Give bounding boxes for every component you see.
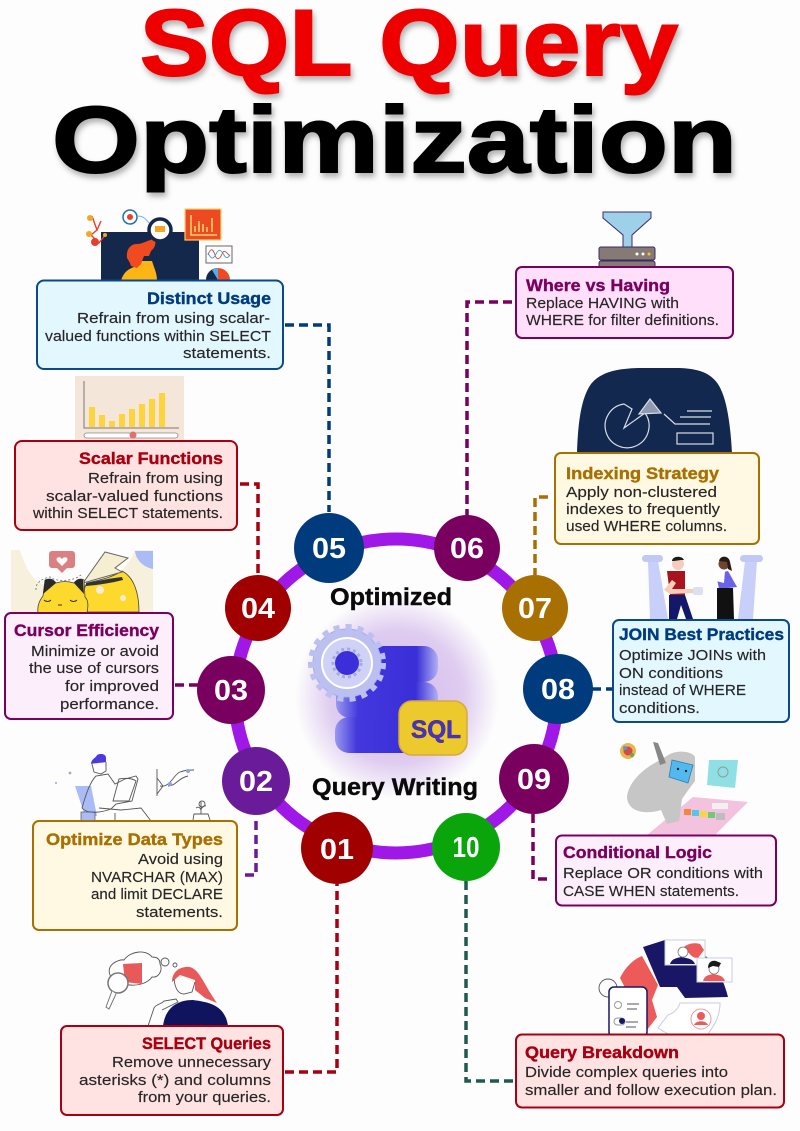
panel: Where vs Having [516,267,733,338]
description: Replace OR conditions with [563,865,763,882]
connector: step 01 [285,884,337,1072]
description: Divide complex queries into [525,1064,728,1081]
step circle 08: 08 [541,674,575,706]
step circle 04: 04 [241,593,275,625]
description [91,851,223,921]
step circle 09: 09 [517,764,551,796]
description: Minimize or avoid [31,643,159,660]
ring connecting the steps [235,539,557,853]
step circle 09 [499,744,569,814]
connector: step 08 [592,687,612,691]
panel: Indexing Strategy [555,453,759,544]
description: valued functions within SELECT [45,328,271,345]
description: instead of WHERE [619,682,746,699]
center label: Optimized: Optimized [330,584,452,611]
connector: step 02 [245,816,256,875]
panel: Query Breakdown [516,1034,784,1108]
step circle 10 [432,813,500,881]
heading: Optimize Data Types [46,830,223,849]
icon: segmented donut with profiles and phone [599,940,732,1037]
icon: woman thinking about a bag [106,952,228,1026]
description [563,865,763,900]
description: and limit DECLARE [91,886,223,903]
icon: dark board with pie chart [577,368,732,453]
description: for improved [65,678,159,695]
heading: Query Breakdown [525,1043,679,1062]
icon: person with laptop and plant [55,754,210,821]
panel: SELECT Queries [61,1026,283,1115]
icon: two people between columns [642,555,763,619]
icon: bar chart with slider [75,376,184,442]
description [526,295,719,329]
description: from your queries. [138,1089,271,1106]
step circle 05 [294,513,364,583]
heading: Indexing Strategy [566,464,720,483]
description [566,484,727,535]
icon: robot on colorful mat [620,742,748,835]
description: statements. [183,345,271,362]
description: ON conditions [619,665,723,682]
description: Optimize JOINs with [619,647,766,664]
description: performance. [60,696,159,713]
panel: Optimize Data Types [33,821,237,930]
panel: Conditional Logic [556,836,776,906]
description [619,647,766,717]
description: scalar-valued functions [46,488,223,505]
connector: step 05 [285,325,329,512]
title [52,0,737,192]
connector: step 09 [533,814,552,879]
description [45,310,271,362]
step circle 10: 10 [452,832,480,864]
heading: Where vs Having [526,276,670,295]
center label: Query Writing: Query Writing [312,774,478,801]
step circle 07 [502,575,568,641]
step circle 02 [222,747,290,815]
description: statements. [136,904,223,921]
heading: Conditional Logic [563,843,712,862]
connector: step 10 [466,881,513,1081]
heading: Cursor Efficiency [14,621,160,640]
center illustration: database, gear and SQL badge: SQL [411,716,461,744]
description: within SELECT statements. [32,505,223,522]
description [29,643,159,713]
step circle 04 [225,575,291,641]
description: smaller and follow execution plan. [525,1082,777,1099]
step circle 07: 07 [518,593,552,625]
panel: Scalar Functions [15,441,237,530]
description: Refrain from using [88,470,223,487]
description [32,470,223,522]
description: Refrain from using scalar- [77,310,270,327]
description: asterisks (*) and columns [79,1072,271,1089]
heading: JOIN Best Practices [619,625,784,644]
panel: Cursor Efficiency [5,613,173,719]
connector: step 04 [240,484,258,575]
description: WHERE for filter definitions. [526,312,719,329]
center illustration: database, gear and SQL badge [295,595,499,799]
description: Avoid using [138,851,223,868]
description [79,1054,272,1106]
icon: funnel over server [599,212,655,268]
description: Remove unnecessary [112,1054,272,1071]
title line: Optimization: Optimization [52,87,737,192]
description: conditions. [619,700,700,717]
connector: step 03 [175,683,198,687]
step circle 06 [434,515,500,581]
step circle 05: 05 [312,533,346,565]
panel: JOIN Best Practices [613,620,789,722]
connector: step 07 [535,497,548,575]
step circle 01 [301,812,373,884]
heading: SELECT Queries [142,1034,271,1053]
heading: Scalar Functions [79,449,223,468]
description: CASE WHEN statements. [563,883,739,900]
step circle 08 [523,654,593,724]
heading: Distinct Usage [147,289,271,308]
step circle 06: 06 [450,533,484,565]
description: indexes to frequently [566,501,721,518]
step circle 01: 01 [320,834,354,866]
description: used WHERE columns. [566,518,727,535]
description: Apply non-clustered [566,484,717,501]
icon: sleeping cat with cursor [11,550,153,613]
step circle 02: 02 [239,766,273,798]
description [525,1064,777,1099]
description: the use of cursors [29,660,159,677]
description: NVARCHAR (MAX) [91,869,223,886]
description: Replace HAVING with [526,295,679,312]
icon: analyst at screen with charts [86,209,232,282]
step circle 03 [197,656,265,724]
step circle 03: 03 [214,675,248,707]
panel: Distinct Usage [37,280,283,369]
connector: step 06 [467,302,512,515]
